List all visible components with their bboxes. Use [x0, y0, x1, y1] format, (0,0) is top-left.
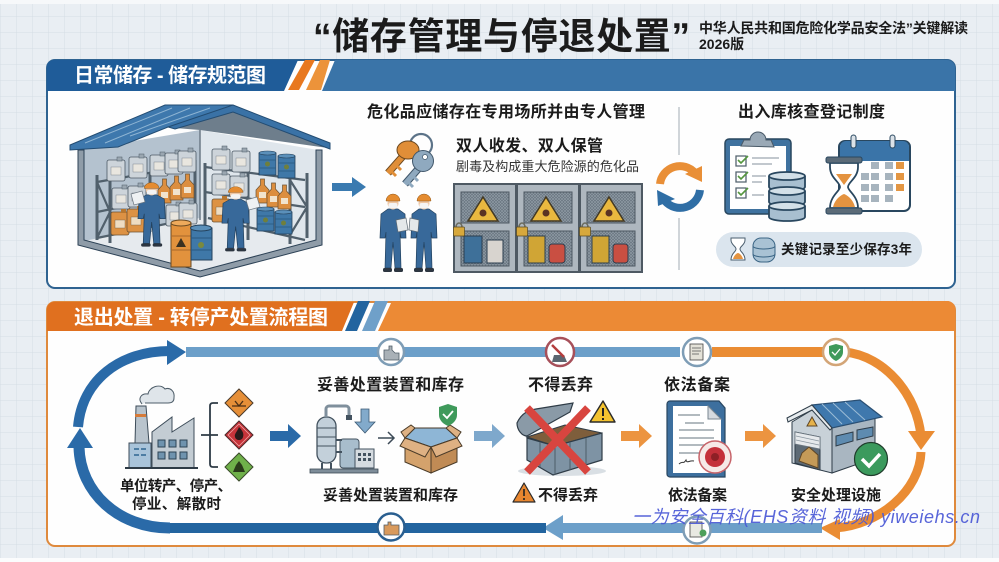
- arrow: small to box: [378, 432, 394, 444]
- caption: legal filing: 依法备案: [668, 486, 727, 504]
- text: proper disposal caption: 妥善处置装置和库存: [323, 486, 458, 504]
- text: dual custody: 双人收发、双人保管: [456, 136, 603, 155]
- subtitle: 2026版: [699, 36, 744, 52]
- icon: factory: [125, 386, 198, 468]
- icon: keys: [388, 134, 434, 187]
- arrow: dark blue: [270, 424, 301, 448]
- heading: no abandoning: 不得丢弃: [528, 375, 593, 394]
- arrow: orange 2: [745, 424, 776, 448]
- text: trigger condition: 单位转产、停产、: [120, 477, 232, 495]
- panel header: daily storage: 日常储存 - 储存规范图: [74, 64, 266, 87]
- locked cabinets: [453, 184, 642, 272]
- icon: yellow warning: [590, 401, 615, 422]
- heading: proper disposal: 妥善处置装置和库存: [317, 376, 464, 394]
- heading: legal filing: 依法备案: [664, 375, 730, 394]
- callout: records kept 3 years: [716, 232, 922, 267]
- arrow: orange 1: [621, 424, 652, 448]
- icon: process equipment: [310, 406, 378, 473]
- callout: records kept 3 years: 关键记录至少保存3年: [781, 241, 912, 257]
- panel: daily storage: [47, 60, 955, 288]
- icon: two workers: [380, 194, 437, 272]
- flow node: filing: [683, 338, 711, 366]
- icon: cycle arrows: [657, 166, 702, 208]
- caption: safe facility: 安全处理设施: [791, 486, 881, 504]
- flow node: plant: [378, 339, 404, 365]
- panel header: exit disposal: [47, 301, 955, 331]
- flow node: no dumping: [546, 338, 574, 366]
- right shelf: [205, 146, 307, 244]
- arrow: light blue: [474, 424, 505, 448]
- flow ring: [67, 340, 935, 540]
- icon: safe disposal facility: [787, 400, 888, 476]
- caption: no abandoning: [513, 483, 598, 504]
- title: “储存管理与停退处置”: [313, 16, 690, 57]
- arrow: down feed: [355, 409, 375, 433]
- icon: filing document with seal: [667, 401, 731, 477]
- text: dual custody: 剧毒及构成重大危险源的危化品: [456, 159, 639, 174]
- heading: inbound outbound register: 出入库核查登记制度: [738, 102, 885, 121]
- text: dual custody: [456, 136, 639, 174]
- icon: checklist with database: [725, 132, 805, 221]
- flow node: shield: [823, 339, 849, 365]
- panel header: exit disposal: 退出处置 - 转停产处置流程图: [74, 305, 328, 329]
- arrow: warehouse to rules: [332, 177, 366, 197]
- floor drums: [171, 220, 212, 267]
- icon: crossed chest: [517, 403, 606, 476]
- subtitle: [699, 20, 968, 52]
- left shelf: [97, 148, 197, 243]
- icon: calendar with hourglass: [826, 135, 910, 214]
- text: trigger condition: 停业、解散时: [132, 495, 222, 513]
- watermark: 一为安全百科(EHS资料 视频) yiweiehs.cn: [632, 507, 980, 527]
- subtitle: 中华人民共和国危险化学品安全法”关键解读: [699, 20, 968, 36]
- text: trigger condition: [120, 477, 232, 513]
- workers in warehouse: [131, 183, 260, 251]
- flow node: plant bottom: [378, 514, 404, 540]
- flow node: document bottom: [684, 516, 710, 544]
- warehouse illustration: [70, 105, 330, 277]
- heading: dedicated storage: 危化品应储存在专用场所并由专人管理: [367, 102, 645, 121]
- bracket and hazard diamonds: [201, 389, 253, 481]
- icon: box with shield: [400, 404, 462, 473]
- panel header: daily storage: [47, 60, 955, 91]
- caption: no abandoning: 不得丢弃: [538, 486, 598, 504]
- panel: exit disposal: [47, 301, 955, 546]
